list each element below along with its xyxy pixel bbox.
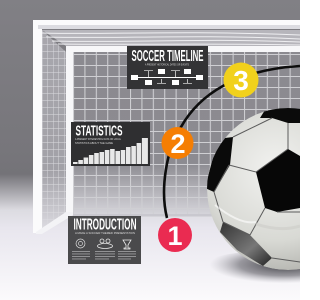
panel seams: [214, 118, 300, 262]
heading: introduction: INTRODUCTION: [74, 216, 136, 234]
icon: trophy: [123, 240, 131, 249]
marker 3: 3: [233, 65, 249, 96]
bar chart: [73, 138, 148, 164]
inner frame: [66, 46, 300, 214]
marker 1: [158, 218, 192, 252]
marker 1: 1: [167, 221, 183, 251]
panel: statistics: STATISTICS ABOUT THE GAME: [75, 141, 113, 145]
marker 2: 2: [170, 129, 186, 159]
heading: statistics: STATISTICS: [76, 124, 123, 140]
marker 3: [224, 62, 258, 98]
marker 2: [162, 127, 194, 159]
icon: soccer ball: [76, 239, 85, 248]
timeline diagram: [131, 69, 203, 85]
panel: soccer timeline: [127, 46, 208, 89]
subtitle: A MAKE A SOCCER THEMED PRESENTATION: [75, 231, 135, 235]
subtitle: A PRESENT INTERESTING DATA OR LOCAL: [75, 137, 121, 141]
side net panel: [42, 30, 66, 230]
black patches: [260, 108, 300, 123]
soccer goal: [33, 20, 300, 234]
roof net panel: [42, 30, 300, 46]
text columns: [72, 251, 136, 259]
outer frame: [33, 20, 300, 233]
ball shadow: [200, 251, 320, 285]
curved timeline path: [164, 66, 300, 218]
heading: soccer timeline: SOCCER TIMELINE: [132, 48, 204, 65]
panel: introduction: [68, 216, 141, 264]
soccer ball: [207, 108, 300, 270]
back net panel: [73, 52, 300, 215]
subtitle: A PRESENT HISTORICAL DATES OR EVENTS: [145, 62, 189, 66]
base bars: [36, 212, 73, 234]
panel: statistics: [71, 122, 150, 166]
icon: team: [98, 239, 112, 248]
